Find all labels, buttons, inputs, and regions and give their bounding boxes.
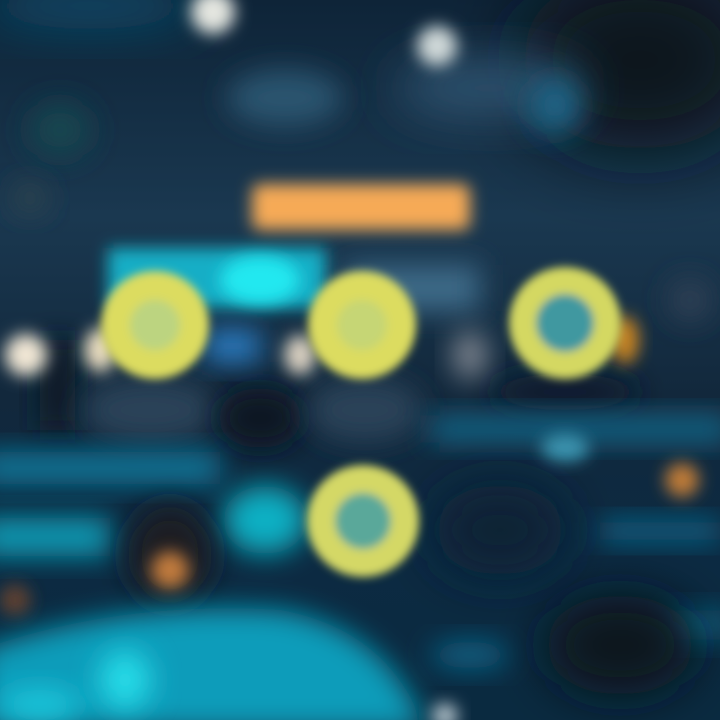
background glow shapes	[0, 0, 720, 448]
title bar	[252, 184, 470, 230]
yellow ring 4	[307, 465, 419, 577]
bottom cyan glow	[0, 608, 458, 720]
cyan banner	[84, 248, 639, 379]
lower cyan bands	[0, 415, 720, 695]
orange lights	[0, 463, 699, 616]
yellow ring 3	[509, 267, 621, 379]
lights at top	[5, 0, 457, 376]
yellow ring 2	[308, 271, 416, 379]
yellow ring 1	[101, 271, 209, 379]
